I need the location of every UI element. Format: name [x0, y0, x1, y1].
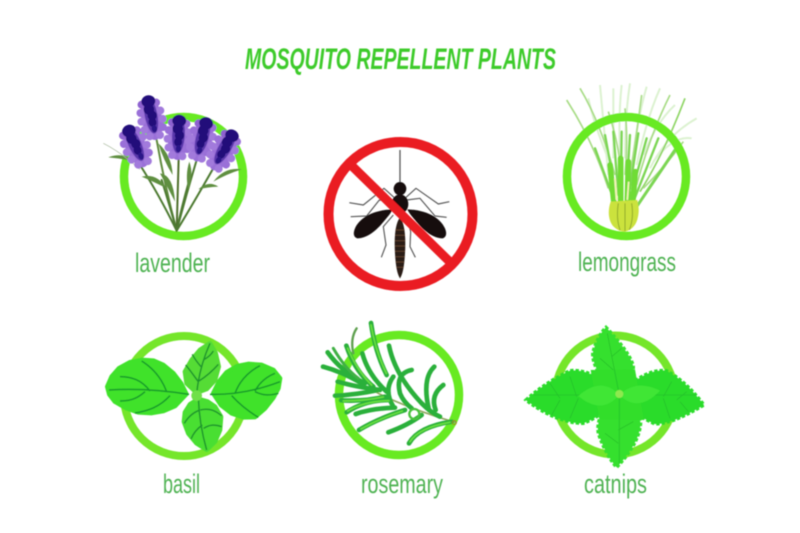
label: lavender: lavender: [135, 248, 210, 278]
ring: lemongrass: [567, 117, 686, 236]
icon: catnip leaves: [526, 327, 704, 467]
ring: catnips: [556, 336, 674, 454]
flower spikes: [113, 93, 248, 177]
lemongrass bulb: [609, 200, 639, 232]
top leaf: [185, 343, 219, 394]
icon: mosquito: [349, 150, 449, 278]
ring: rosemary: [339, 335, 459, 455]
label: lemongrass: lemongrass: [578, 247, 676, 277]
panel: lemongrass: [567, 83, 697, 277]
bottom leaf: [598, 395, 641, 467]
leaf center fill: [591, 369, 644, 420]
panel: lavender: [103, 93, 248, 278]
ring: lavender: [124, 117, 243, 236]
top leaf: [593, 327, 633, 395]
icon: lemongrass plant: [567, 83, 697, 232]
panel: no mosquito sign: [328, 142, 472, 286]
icon: basil leaves: [107, 343, 280, 450]
label: catnips: catnips: [584, 469, 647, 499]
label: rosemary: rosemary: [361, 469, 443, 499]
panel: catnips: [526, 327, 704, 499]
right leaf: [210, 364, 280, 417]
panel: basil: [107, 336, 280, 499]
title: MOSQUITO REPELLENT PLANTS: [245, 43, 556, 76]
right leaf: [619, 370, 704, 424]
left leaf: [526, 370, 619, 423]
icon: rosemary sprig: [323, 323, 456, 443]
label: basil: basil: [163, 469, 200, 499]
panel: rosemary: [323, 323, 459, 499]
ring: basil: [124, 336, 244, 456]
icon: lavender plant: [103, 93, 248, 231]
prohibition sign: [328, 142, 472, 286]
leaf veins: [533, 333, 697, 463]
left leaf: [107, 360, 189, 413]
bottom leaf: [184, 397, 222, 450]
